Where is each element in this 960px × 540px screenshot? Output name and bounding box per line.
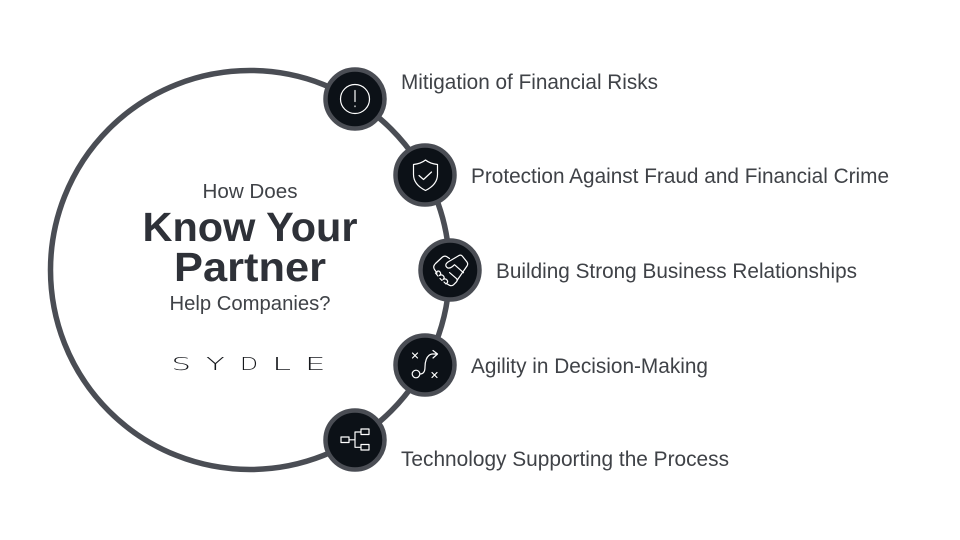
item 4: decision-making bbox=[396, 336, 708, 394]
item 5: technology: Technology Supporting the Process bbox=[401, 448, 729, 471]
item 3: business relationships bbox=[420, 240, 857, 300]
large ring bbox=[50, 70, 450, 470]
title block bbox=[142, 181, 358, 315]
logo: SYDLE: S bbox=[172, 354, 191, 374]
item 4: decision-making: Agility in Decision-Making bbox=[471, 355, 708, 378]
item 3: business relationships: Building Strong Business Relationships bbox=[496, 260, 857, 283]
title block: Help Companies? bbox=[170, 293, 330, 315]
item 2: fraud protection: Protection Against Fraud and Financial Crime bbox=[471, 165, 889, 188]
logo: SYDLE: L bbox=[272, 354, 291, 375]
item 5: technology bbox=[326, 410, 729, 471]
logo: SYDLE bbox=[172, 354, 325, 375]
icon: alert circle bbox=[326, 70, 384, 128]
icon: flow diagram bbox=[326, 410, 384, 470]
item 1: financial risks: Mitigation of Financial Risks bbox=[401, 71, 658, 94]
title block: Know Your bbox=[142, 204, 358, 250]
icon: strategy path bbox=[396, 336, 454, 394]
title block: Partner bbox=[174, 244, 326, 290]
item 1: financial risks bbox=[326, 70, 658, 128]
item 2: fraud protection bbox=[396, 146, 889, 204]
logo: SYDLE: E bbox=[305, 354, 325, 375]
icon: handshake bbox=[420, 240, 480, 300]
logo: SYDLE: D bbox=[240, 354, 258, 374]
icon: shield check bbox=[396, 146, 454, 204]
logo: SYDLE: Y bbox=[206, 354, 225, 374]
title block: How Does bbox=[202, 181, 298, 203]
